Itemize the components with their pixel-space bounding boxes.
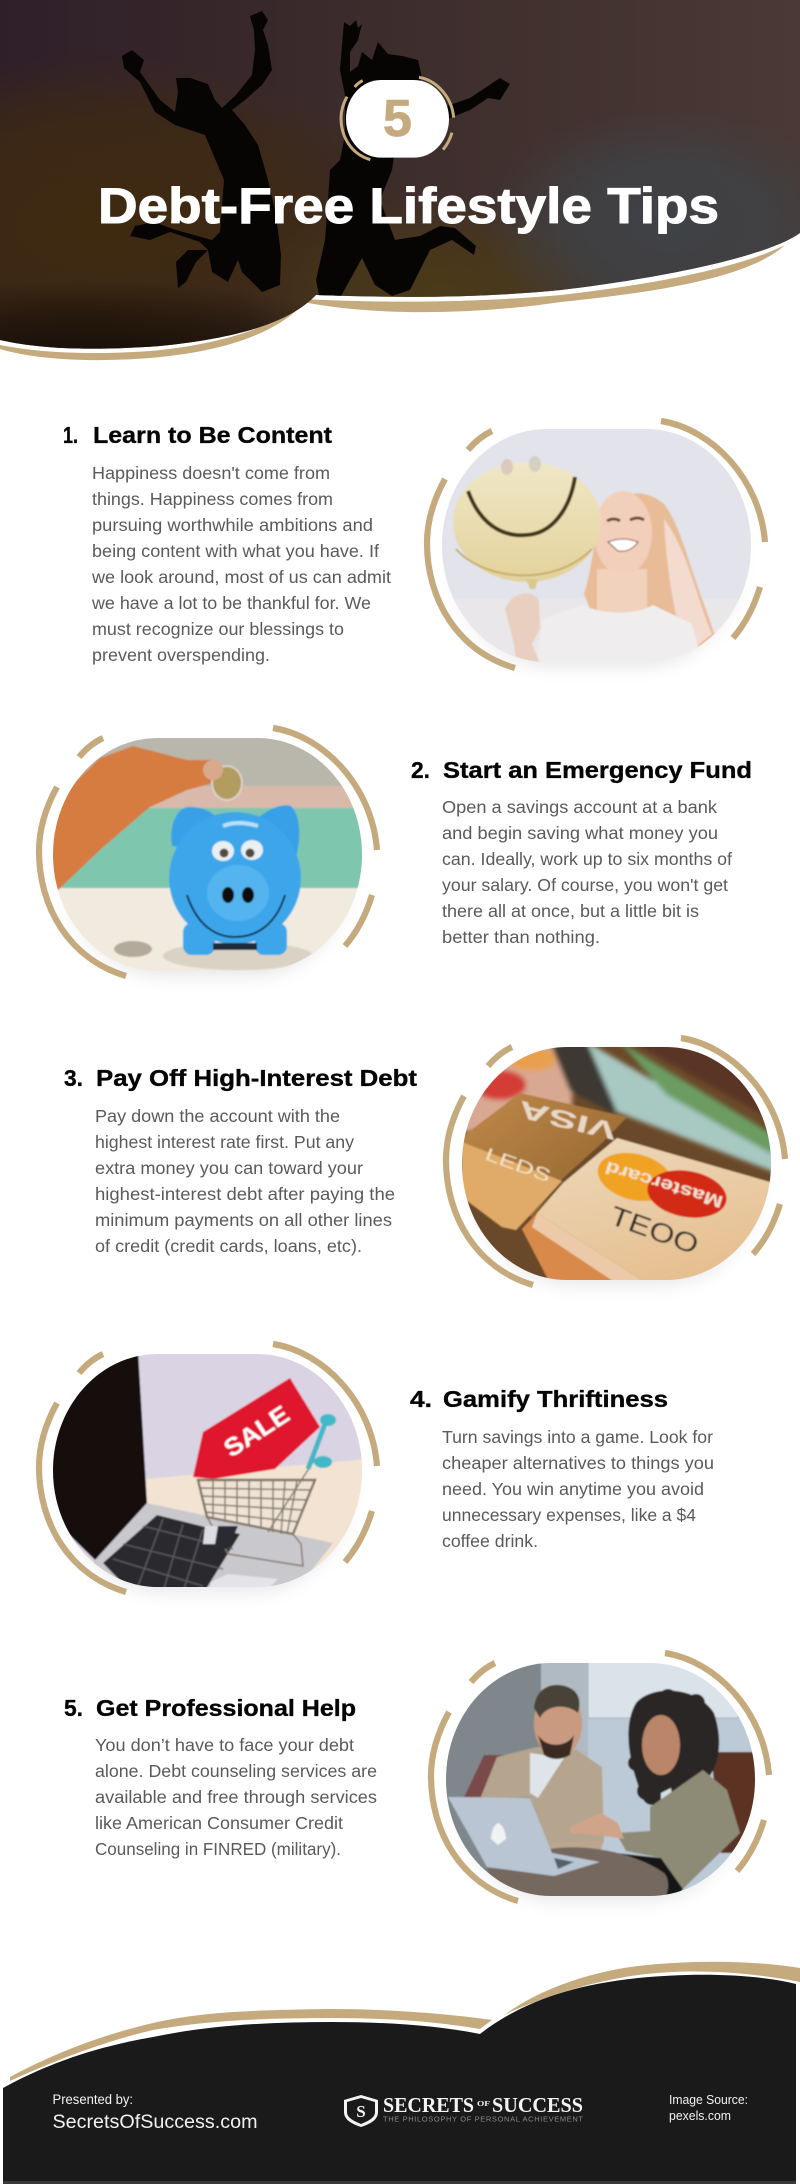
heading 2: Start an Emergency Fund (443, 757, 752, 783)
section 1 text (63, 422, 391, 665)
body 1: we have a lot to be thankful for. We (91, 593, 371, 613)
body 4: Turn savings into a game. Look for (442, 1427, 713, 1447)
footer logo: OF (477, 2100, 490, 2108)
section 3 photo: credit cards: TEOO (606, 1200, 703, 1260)
body 1: Happiness doesn't come from (92, 463, 330, 483)
body 3: Pay down the account with the (95, 1106, 340, 1126)
footer presented by: SecretsOfSuccess.com (52, 2112, 258, 2133)
body 1: prevent overspending. (92, 645, 270, 665)
footer image source: Image Source: (669, 2092, 748, 2107)
heading 1: Learn to Be Content (93, 422, 332, 448)
body 4 (442, 1427, 714, 1551)
icon: shield: S (356, 2102, 366, 2121)
footer logo: THE PHILOSOPHY OF PERSONAL ACHIEVEMENT (383, 2114, 583, 2124)
body 3: of credit (credit cards, loans, etc). (95, 1236, 362, 1256)
section 2 photo: blue piggy bank (39, 728, 377, 978)
silhouette: right jumper (316, 20, 510, 300)
section 4 photo: laptop and sale cart (39, 1344, 377, 1594)
icon: shield (344, 2095, 378, 2127)
body 1 (91, 463, 391, 665)
heading 3: Pay Off High-Interest Debt (96, 1065, 417, 1091)
section 4 photo: laptop and sale cart: SALE (219, 1400, 295, 1463)
footer logo (344, 2093, 583, 2127)
section 3 photo: credit cards: VISA (516, 1095, 619, 1144)
footer tan swoosh right (503, 1962, 800, 2016)
section 2 text (411, 757, 752, 947)
section 3 photo: credit cards: Mastercard (603, 1158, 725, 1211)
body 5: alone. Debt counseling services are (95, 1761, 377, 1781)
heading 1: 1. (63, 422, 78, 448)
body 1: pursuing worthwhile ambitions and (92, 515, 373, 535)
body 2: and begin saving what money you (442, 823, 718, 843)
section 3 photo: credit cards (446, 1038, 785, 1287)
footer image source (669, 2092, 748, 2123)
title: Debt-Free Lifestyle Tips (98, 178, 719, 234)
heading 4: 4. (410, 1386, 432, 1412)
section 5 photo: two people at laptop (431, 1653, 769, 1903)
body 4: need. You win anytime you avoid (442, 1479, 704, 1499)
section 3 photo: credit cards: LEDS (483, 1144, 553, 1186)
header banner (0, 0, 800, 360)
body 4: coffee drink. (442, 1531, 538, 1551)
footer presented by: Presented by: (52, 2092, 133, 2107)
header photo background (0, 0, 800, 349)
body 2: can. Ideally, work up to six months of (442, 849, 732, 869)
body 3: minimum payments on all other lines (95, 1210, 392, 1230)
silhouette: left jumper (122, 11, 281, 292)
heading 5: Get Professional Help (96, 1695, 356, 1721)
body 5 (95, 1735, 377, 1859)
footer dark shape (3, 1975, 796, 2181)
body 2: there all at once, but a little bit is (442, 901, 699, 921)
body 2: better than nothing. (442, 927, 600, 947)
tan swoosh under header right (303, 245, 785, 312)
heading 4: Gamify Thriftiness (443, 1386, 668, 1412)
section 4 text (410, 1386, 714, 1551)
body 3: highest interest rate first. Put any (95, 1132, 354, 1152)
section 3 text (64, 1065, 417, 1256)
body 2 (442, 797, 732, 947)
body 1: being content with what you have. If (92, 541, 379, 561)
footer tan swoosh left (10, 2009, 492, 2081)
footer logo: SUCCESS (492, 2093, 583, 2117)
tan swoosh under header left (0, 303, 304, 360)
footer band (3, 1962, 800, 2184)
body 4: cheaper alternatives to things you (442, 1453, 714, 1473)
body 1: must recognize our blessings to (92, 619, 344, 639)
body 2: Open a savings account at a bank (442, 797, 717, 817)
heading 2: 2. (411, 757, 430, 783)
badge: number five (341, 77, 454, 160)
body 5: available and free through services (95, 1787, 377, 1807)
body 3: extra money you can toward your (95, 1158, 363, 1178)
body 3 (95, 1106, 395, 1256)
body 1: things. Happiness comes from (92, 489, 333, 509)
footer presented by (52, 2092, 258, 2133)
body 1: we look around, most of us can admit (91, 567, 391, 587)
body 4: unnecessary expenses, like a $4 (442, 1505, 696, 1525)
section 5 text (64, 1695, 377, 1859)
heading 3: 3. (64, 1065, 83, 1091)
section 1 photo: woman with smiley balloon (427, 421, 765, 669)
badge arcs (341, 77, 454, 160)
badge numeral: 5 (383, 90, 412, 148)
footer image source: pexels.com (669, 2108, 731, 2123)
footer logo: SECRETS (383, 2093, 474, 2117)
body 5: You don’t have to face your debt (95, 1735, 354, 1755)
heading 5: 5. (64, 1695, 83, 1721)
badge white pill (346, 80, 449, 158)
body 5: Counseling in FINRED (military). (95, 1839, 341, 1859)
body 5: like American Consumer Credit (95, 1813, 343, 1833)
body 3: highest-interest debt after paying the (95, 1184, 395, 1204)
body 2: your salary. Of course, you won't get (442, 875, 728, 895)
